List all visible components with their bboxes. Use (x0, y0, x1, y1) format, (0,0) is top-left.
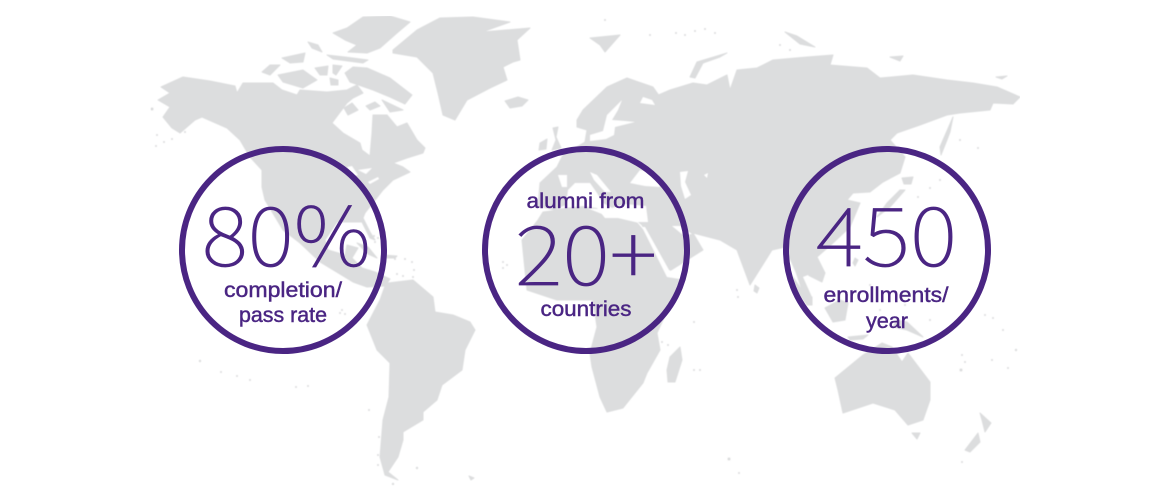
label line 2: pass rate (239, 304, 327, 327)
Iceland (505, 97, 528, 108)
Red Sea and Gulf of Aden (642, 227, 680, 279)
scattered island dots (150, 19, 1017, 485)
Madagascar (667, 347, 682, 382)
Australia (835, 343, 930, 425)
Africa (522, 207, 680, 412)
South America (367, 280, 475, 480)
Adriatic Sea (590, 172, 611, 192)
Arctic Eurasia islands (590, 32, 1007, 79)
White Sea (640, 97, 655, 105)
Bay of Biscay (558, 175, 567, 187)
inland seas (347, 97, 815, 297)
New Zealand (965, 413, 991, 452)
ring (786, 149, 988, 351)
North America (158, 77, 425, 287)
ring (182, 149, 384, 351)
world map (150, 16, 1020, 485)
number: 450 (816, 171, 957, 290)
Caribbean and Falklands (357, 243, 474, 480)
Tasmania (912, 433, 920, 439)
Persian Gulf (672, 226, 692, 235)
label line 2: countries (540, 298, 632, 321)
stat circle: completion rate (182, 149, 384, 351)
label line 2: year (866, 310, 908, 333)
label: completion/ (224, 279, 342, 302)
Aral Sea (704, 173, 708, 178)
stat circle: alumni countries (485, 149, 687, 351)
ring (485, 149, 687, 351)
landmasses (158, 16, 1020, 480)
stat circle: enrollments (786, 149, 988, 351)
Baltic Sea (590, 100, 635, 141)
number: 80% (202, 171, 371, 290)
Arctic islands (262, 16, 412, 115)
Greenland (393, 17, 530, 120)
label: alumni from (526, 190, 644, 213)
Black Sea (630, 170, 660, 187)
label: enrollments/ (824, 284, 949, 307)
number: 20+ (515, 190, 657, 309)
Asian islands (754, 117, 953, 340)
Great Lakes (347, 166, 379, 184)
Eurasia (538, 55, 1020, 305)
Gulf of Thailand (803, 275, 815, 297)
United Kingdom and Ireland (539, 127, 561, 150)
Caspian Sea (680, 171, 691, 199)
Mediterranean Sea (556, 183, 648, 222)
